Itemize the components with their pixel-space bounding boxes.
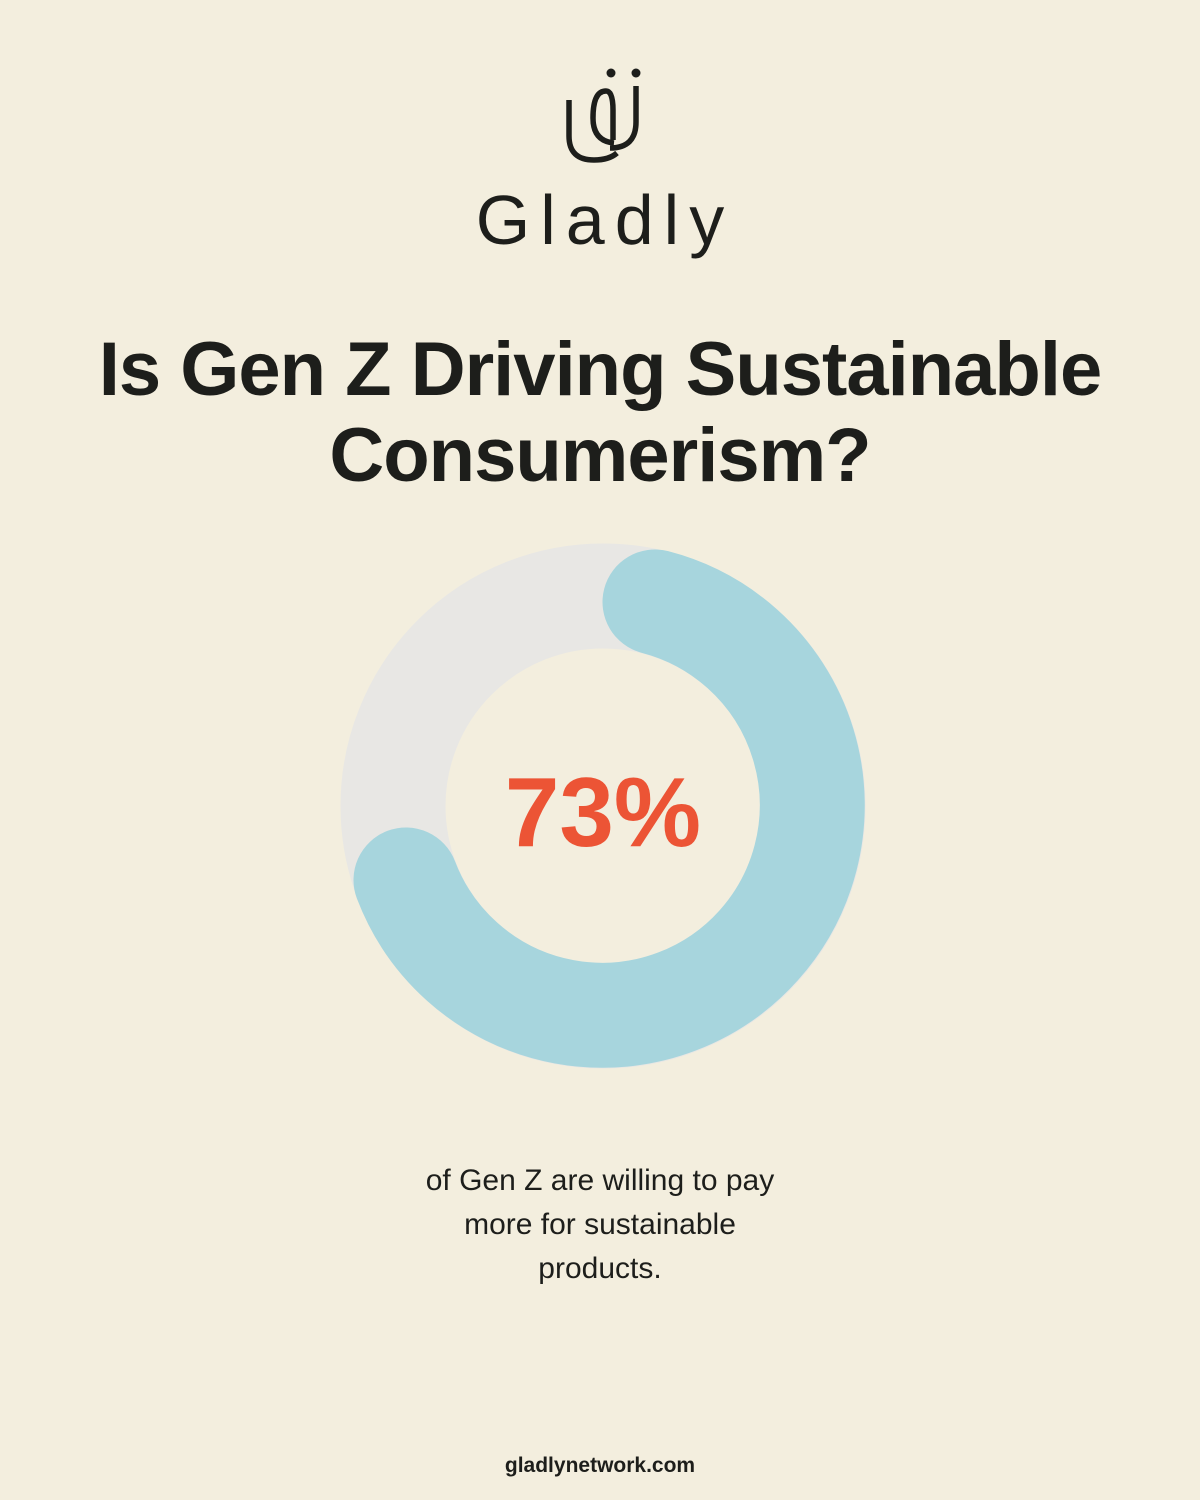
title — [99, 327, 1101, 498]
caption: products. — [538, 1252, 662, 1285]
caption: of Gen Z are willing to pay — [426, 1164, 774, 1197]
caption — [426, 1164, 774, 1285]
stat value: 73% — [505, 757, 701, 867]
donut chart — [340, 544, 866, 1068]
title: Consumerism? — [329, 413, 871, 498]
title: Is Gen Z Driving Sustainable — [99, 327, 1101, 412]
logo wordmark: Gladly — [476, 181, 734, 259]
logo icon — [566, 68, 640, 163]
caption: more for sustainable — [464, 1208, 736, 1241]
footer url: gladlynetwork.com — [505, 1454, 695, 1477]
